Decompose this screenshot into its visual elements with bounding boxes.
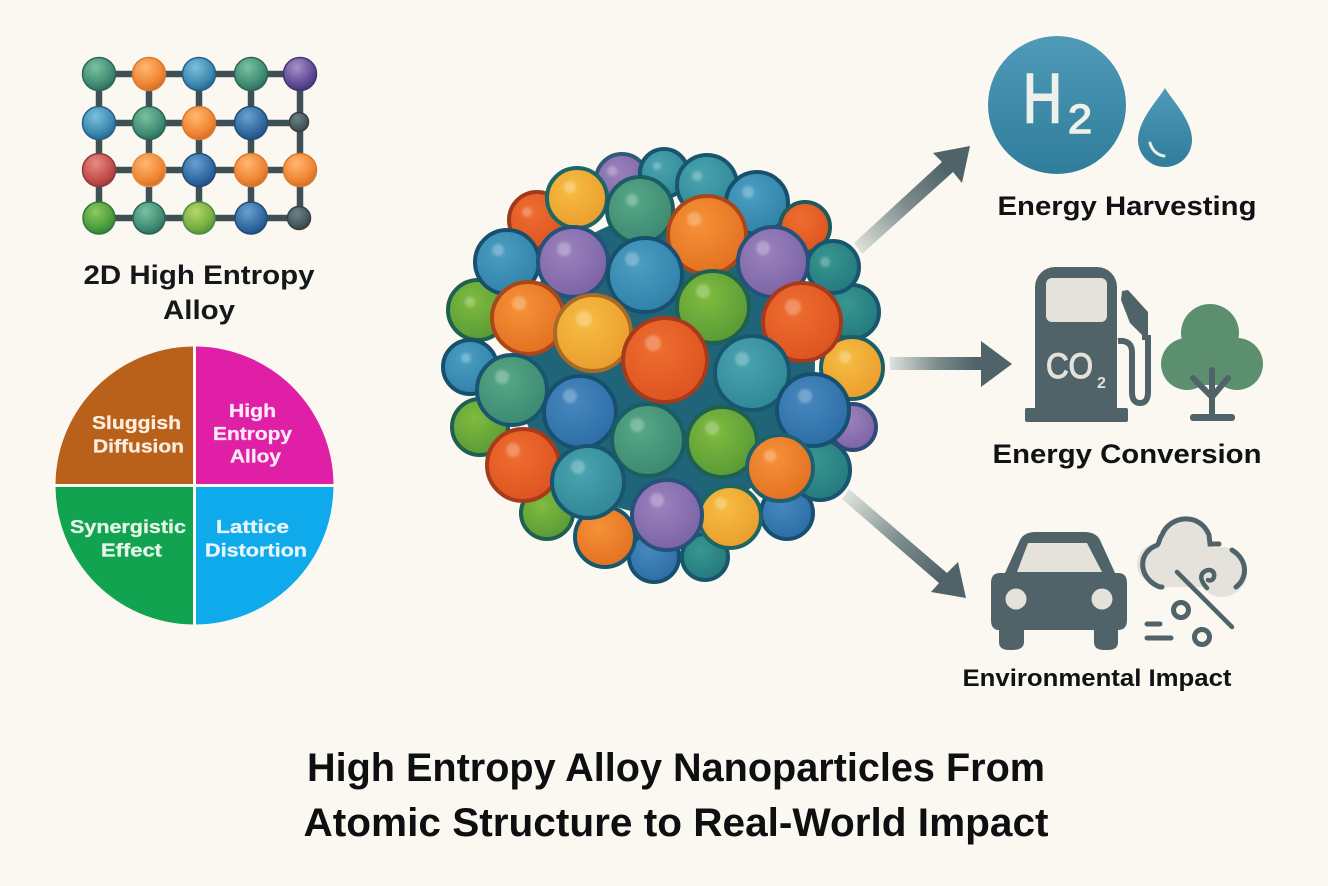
pie segment: High Entropy Alloy: Entropy	[213, 424, 292, 444]
title	[304, 746, 1048, 845]
icon: water drop	[1138, 88, 1192, 167]
lattice diagram: 2D high entropy alloy	[82, 58, 316, 234]
pie segment: Lattice Distortion: Lattice	[216, 517, 289, 537]
pie segment: Sluggish Diffusion: Diffusion	[93, 436, 184, 456]
arrow: to environmental impact	[842, 489, 966, 598]
pie segment: Synergistic Effect: Effect	[101, 540, 162, 560]
icon: emission cloud with particles	[1137, 517, 1247, 644]
label: Environmental Impact: Environmental Impact	[962, 665, 1232, 692]
icon: hydrogen H2 circle	[988, 36, 1126, 174]
arrow: to energy conversion	[890, 341, 1012, 387]
label: Energy Harvesting: Energy Harvesting	[998, 191, 1256, 221]
icon: CO2 fuel pump: CO	[1046, 347, 1093, 386]
pie segment: High Entropy Alloy: Alloy	[230, 446, 281, 466]
icon: hydrogen H2 circle: 2	[1068, 96, 1092, 142]
heading: 2D High Entropy Alloy: 2D High Entropy	[84, 260, 314, 290]
label: Energy Conversion: Energy Conversion	[992, 439, 1262, 469]
pie segment: Lattice Distortion: Distortion	[205, 540, 307, 560]
pie segment: Sluggish Diffusion: Sluggish	[92, 413, 181, 433]
title: Atomic Structure to Real-World Impact	[304, 801, 1048, 845]
pie segment: Sluggish Diffusion	[56, 346, 193, 484]
pie chart: high entropy alloy core effects	[56, 346, 334, 624]
title: High Entropy Alloy Nanoparticles From	[307, 746, 1045, 790]
pie segment: Lattice Distortion	[196, 487, 334, 624]
pie segment: Synergistic Effect: Synergistic	[70, 517, 186, 537]
heading: 2D High Entropy Alloy	[84, 260, 314, 325]
icon: tree	[1161, 304, 1263, 421]
pie segment: High Entropy Alloy: High	[229, 401, 276, 421]
pie segment: High Entropy Alloy	[196, 346, 334, 484]
arrow: to energy harvesting	[854, 146, 970, 254]
icon: CO2 fuel pump	[1025, 267, 1148, 422]
central nanoparticle cluster of alloy atoms	[443, 149, 883, 582]
icon: hydrogen H2 circle: H	[1023, 59, 1062, 137]
icon: CO2 fuel pump: 2	[1097, 375, 1106, 392]
pie segment: Synergistic Effect	[56, 487, 193, 624]
icon: car	[991, 532, 1127, 650]
heading: 2D High Entropy Alloy: Alloy	[163, 295, 235, 325]
